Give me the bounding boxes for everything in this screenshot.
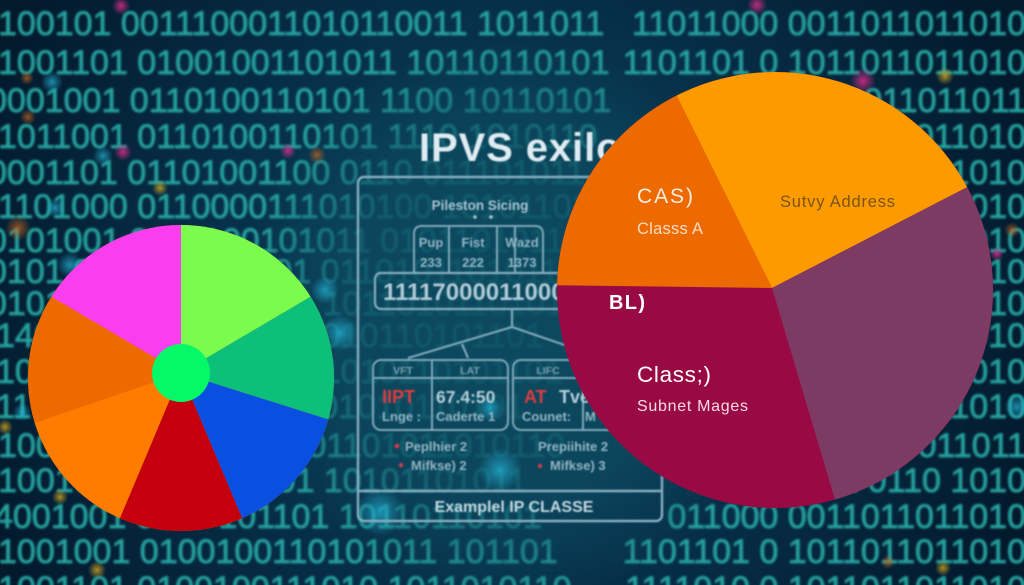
binary digit rows: 1010 0110 011011	[750, 427, 1024, 465]
label: class A title: CAS)	[637, 185, 693, 208]
right class table: M	[585, 409, 596, 424]
slice: survey address	[676, 72, 968, 288]
field cells: Pup	[419, 235, 443, 250]
slice: mauve	[772, 187, 993, 500]
binary digit rows: 0101 1011010110101 1011010110101	[0, 285, 564, 323]
small multicolour pie chart	[28, 225, 334, 531]
right class table: Counet:	[522, 409, 571, 424]
binary digit rows: 101 011 0101 1010	[735, 222, 1024, 260]
label: class title: Class;)	[637, 362, 711, 387]
binary digit rows: 11 01010110 1010 1101010110101	[0, 388, 525, 426]
diagram title: IPVS exilo	[419, 126, 621, 170]
binary digit rows: 1001001 0100100110101011 101101	[0, 533, 558, 571]
binary digit rows: 1011001 0110100110101 1110 1010110	[0, 118, 597, 156]
left bullet list	[395, 439, 467, 473]
label: BL: BL)	[609, 292, 645, 314]
left class table: LAT	[460, 365, 480, 377]
diagram footer caption: Examplel IP CLASSE	[435, 499, 594, 516]
pileston heading: Pileston Sicing	[432, 198, 528, 213]
slice: class A	[557, 96, 772, 288]
binary digit rows: 140 01011010 1101 1010110101101	[0, 317, 544, 355]
right class table: AT	[524, 387, 547, 407]
field cells: 222	[462, 255, 484, 270]
label: survey address: Sutvy Address	[780, 193, 895, 211]
field cells: Fist	[461, 235, 485, 250]
field cells: 233	[420, 255, 442, 270]
binary digit rows: 1011 0 101101 11010	[703, 154, 1024, 192]
binary address box	[375, 273, 635, 309]
central blurred diagram	[358, 126, 662, 521]
left class table: Caderte 1	[436, 409, 495, 424]
label: subnet caption: Subnet Mages	[637, 398, 748, 415]
right class table	[513, 360, 623, 430]
binary digit rows: 0001101 01101001100 0110 011101011	[0, 154, 585, 192]
field cells	[414, 226, 543, 272]
binary address box: 11117000011000	[383, 279, 565, 306]
binary digit rows: 1010 110 101 1010	[735, 253, 1024, 291]
binary digit rows: 1101101 0 1011011011010	[623, 44, 1024, 82]
field cells: Wazd	[505, 235, 539, 250]
binary digit rows: 011000 0011011011010	[667, 498, 1024, 536]
tree connector	[408, 309, 585, 358]
binary digit rows: 1001101 01001001101011 10110110101	[0, 44, 609, 82]
left class table: 67.4:50	[436, 387, 496, 407]
right class table: LIFC	[536, 365, 560, 377]
binary digit rows: 1101 0 10110 11011010	[667, 118, 1024, 156]
heading dots	[473, 215, 493, 219]
binary digit rows: 1101000 0110000111010100 10101101	[0, 188, 590, 226]
right bullet list: Prepiihite 2	[538, 439, 608, 454]
binary digit rows: 1011 01 10110 1010	[719, 188, 1024, 226]
binary digit rows: 100101 0011100011010110011 1011011	[0, 5, 604, 43]
binary digit rows: 1101 0110 11010	[769, 388, 1024, 426]
binary digit rows: 10010 10110 101101 10101101011	[0, 462, 527, 500]
left bullet list: Peplhier 2	[405, 439, 467, 454]
binary digit rows: 0110 10110 1010	[766, 353, 1024, 391]
left class table: Lnge :	[382, 409, 421, 424]
diagram outer frame	[358, 177, 662, 521]
decorative centre haze	[200, 40, 840, 585]
right bullet list	[538, 439, 608, 473]
binary digit rows: 0101001 0110100101011 0101101011	[0, 222, 564, 260]
right class table: Tve	[559, 387, 590, 407]
binary digit rows: 11011000 0011011011010	[632, 5, 1024, 43]
large IP class pie chart	[557, 72, 993, 508]
binary digit rows: 0001001 0110100110101 1100 10110101	[0, 82, 611, 120]
binary digit rows: 0101 0110110101101 01101011010110	[0, 253, 578, 291]
left class table	[373, 360, 508, 430]
binary digit rows: 1011 0101 1101 010	[719, 317, 1024, 355]
binary digit rows: 4001001 0110 101101 10110110101	[0, 498, 542, 536]
binary digit rows: 10 011010010 11010 1010110101101	[0, 353, 563, 391]
left bullet list: Mifkse) 2	[411, 458, 467, 473]
left class table: IIPT	[382, 387, 415, 407]
binary digit rows: 1101101 0 1011011011010	[623, 533, 1024, 571]
small pie hub	[152, 344, 210, 402]
label: class A caption: Classs A	[637, 220, 703, 238]
binary digit rows: 10 1101 1011 010	[757, 285, 1024, 323]
left class table: VFT	[393, 365, 413, 377]
binary digit rows: 1010 1101 0110 1010	[700, 462, 1024, 500]
right bullet list: Mifkse) 3	[550, 458, 606, 473]
binary digit rows: 110 0110 011011011	[717, 82, 1024, 120]
binary digit rows: 100 01011010 101 101101011010110	[0, 427, 565, 465]
field cells: 1373	[508, 255, 536, 270]
